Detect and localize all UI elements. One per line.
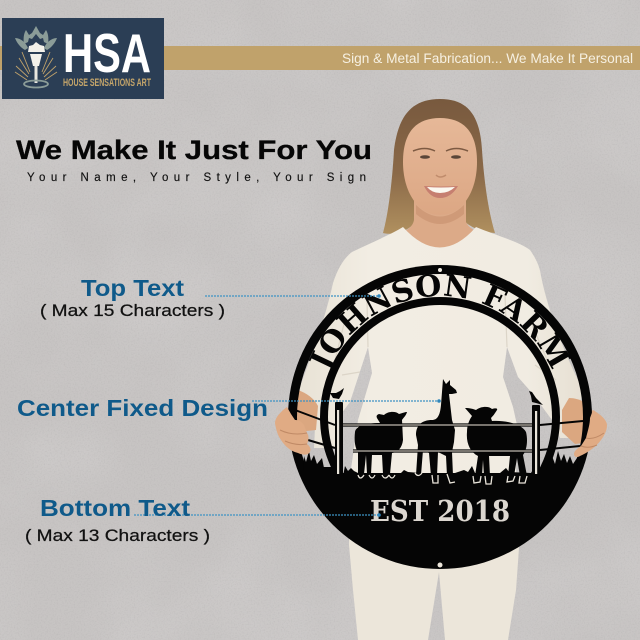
subheading: Your Name, Your Style, Your Sign bbox=[27, 172, 366, 184]
icon: torch with lotus bbox=[15, 26, 57, 88]
fence rails and wires bbox=[295, 410, 583, 451]
left forearm and palm bbox=[288, 390, 318, 432]
left sheep bbox=[355, 412, 407, 474]
facial features bbox=[413, 148, 468, 198]
label: top text: Top Text bbox=[81, 275, 184, 301]
sleeve folds bbox=[335, 295, 556, 380]
hair bbox=[383, 99, 495, 234]
logo panel bbox=[2, 18, 164, 99]
tagline: Sign & Metal Fabrication... We Make It Personal bbox=[342, 51, 633, 66]
sign bottom text: EST 2018 bbox=[370, 494, 510, 528]
label: bottom text: Bottom Text bbox=[40, 495, 190, 521]
logo wordmark HSA: HSA bbox=[63, 22, 151, 84]
logo subtitle: HOUSE SENSATIONS ART bbox=[63, 77, 151, 89]
right hand fingers bbox=[574, 410, 607, 457]
sign top text: JOHNSON FARM bbox=[308, 274, 570, 370]
grass bbox=[303, 451, 578, 476]
brand strip bbox=[0, 46, 640, 70]
callout line: center design bbox=[252, 399, 441, 403]
note: bottom text limit: ( Max 13 Characters ) bbox=[25, 526, 210, 545]
fence posts bbox=[335, 402, 540, 476]
llama bbox=[416, 379, 457, 476]
shirt torso and sleeves bbox=[298, 227, 584, 476]
label: center design: Center Fixed Design bbox=[17, 395, 268, 421]
right bird bbox=[529, 391, 543, 405]
right forearm and palm bbox=[562, 398, 593, 444]
right sheep bbox=[465, 407, 527, 476]
note: top text limit: ( Max 15 Characters ) bbox=[40, 301, 225, 320]
trousers bbox=[349, 470, 519, 640]
sign plate with ring bbox=[288, 265, 592, 569]
metal sign bbox=[288, 265, 592, 569]
neck bbox=[402, 195, 477, 254]
callout line: top text bbox=[205, 294, 381, 298]
woman model bbox=[288, 99, 593, 640]
left bird bbox=[330, 388, 344, 399]
neck shadow bbox=[416, 205, 464, 224]
face bbox=[403, 118, 477, 215]
hoof cutouts bbox=[358, 473, 527, 484]
left hand fingers bbox=[275, 407, 311, 455]
heading: We Make It Just For You bbox=[16, 135, 372, 165]
callout line: bottom text bbox=[134, 513, 381, 517]
